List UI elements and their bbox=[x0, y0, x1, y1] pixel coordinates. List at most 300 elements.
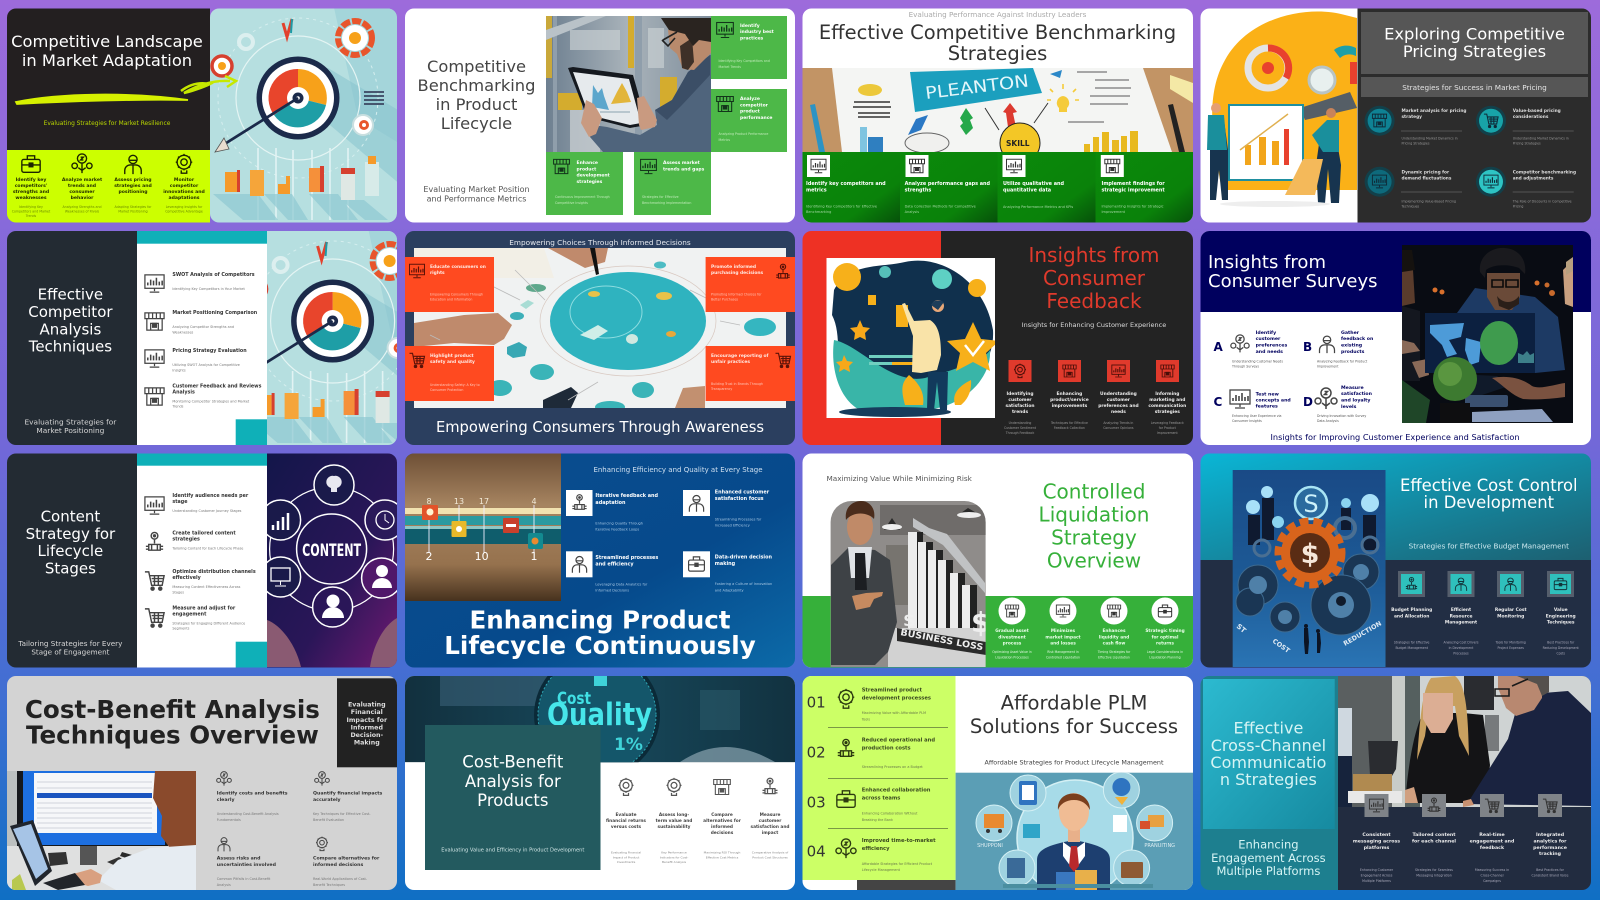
box: product development: development bbox=[576, 173, 611, 179]
item: dynamic pricing: Dynamic pricing for bbox=[1402, 170, 1450, 176]
title: Cost-Benefit Analysis bbox=[25, 695, 320, 724]
item: competitors: Trends bbox=[25, 214, 37, 218]
title card bbox=[425, 725, 600, 870]
item: compare alternatives: Benefit Techniques bbox=[313, 883, 345, 887]
subtitle: Strategies for Effective Budget Management bbox=[1409, 542, 1569, 550]
highlight stroke bbox=[16, 95, 188, 104]
title: Overview bbox=[1047, 548, 1141, 572]
item: customer feedback: Monitoring Competitor Strategies and Market bbox=[172, 400, 250, 404]
title: Feedback bbox=[1046, 289, 1142, 313]
item: market trends: consumer bbox=[69, 189, 95, 195]
callout: unfair practices bbox=[706, 346, 795, 401]
item D: D bbox=[1303, 395, 1313, 409]
item: preferences and needs: customer bbox=[1107, 397, 1131, 403]
item: competitor innovations: Competitive Advantage bbox=[165, 210, 203, 214]
item: customer feedback bbox=[145, 384, 262, 408]
item: consistent messaging: Consistent bbox=[1362, 832, 1391, 838]
item: product improvements: Techniques for Effective bbox=[1050, 421, 1088, 425]
item: marketing strategies: Informing bbox=[1155, 391, 1179, 397]
item: market impact: Minimizes bbox=[1051, 628, 1076, 634]
item: resource management: Processes bbox=[1453, 652, 1469, 656]
photo: businessman with falling bars bbox=[830, 500, 990, 667]
item: audience needs: Identify audience needs per bbox=[172, 493, 249, 499]
item: satisfaction trends: Through Feedback bbox=[1005, 431, 1034, 435]
item: resource management: Resource bbox=[1450, 613, 1472, 619]
subtitle: Stage of Engagement bbox=[31, 648, 110, 657]
item: satisfaction trends: Understanding bbox=[1009, 421, 1031, 425]
title card: Evaluating Value and Efficiency in Product Development bbox=[441, 848, 584, 854]
callout: informed purchasing: purchasing decisions bbox=[711, 270, 764, 276]
photo: businessman with falling bars: $ bbox=[971, 606, 990, 639]
item: asset divestment: Liquidation Processes bbox=[995, 656, 1029, 660]
item: competitor innovations bbox=[163, 154, 205, 214]
item: pricing strategies bbox=[114, 155, 152, 214]
item: SWOT: Identifying Key Competitors in Your Market bbox=[172, 287, 245, 291]
title box: Cross-Channel bbox=[1211, 736, 1326, 755]
item: distribution channels bbox=[145, 569, 256, 594]
item: tailored content: strategies bbox=[172, 536, 200, 542]
item: real-time engagement: Real-time bbox=[1479, 832, 1505, 838]
item: satisfaction trends: customer bbox=[1008, 397, 1032, 403]
row 02: 02 bbox=[807, 743, 826, 761]
image: gears and dollar symbol: S bbox=[1303, 490, 1319, 518]
title: Lifecycle bbox=[441, 114, 512, 133]
item C: concepts and bbox=[1256, 398, 1291, 404]
panel: Competitive Landscape in Market Adaptation bbox=[7, 8, 397, 222]
item: marketing strategies: marketing and bbox=[1149, 397, 1185, 403]
item: consistent messaging: messaging across bbox=[1353, 839, 1400, 845]
item: strategic timing: Liquidation Planning bbox=[1149, 656, 1181, 660]
title: Insights from bbox=[1028, 243, 1160, 267]
item: marketing strategies: strategies bbox=[1155, 409, 1180, 415]
item D: Measure bbox=[1341, 385, 1364, 391]
item: competitor benchmarking bbox=[1476, 167, 1576, 208]
title: Lifecycle Continuously bbox=[444, 631, 756, 660]
item: value engineering: Costs bbox=[1556, 652, 1565, 656]
callout: informed purchasing: Promote informed bbox=[711, 264, 756, 270]
item: iterative feedback: adaptation bbox=[595, 500, 626, 506]
subtitle: Tailoring Strategies for Every bbox=[17, 639, 123, 648]
title: Strategy bbox=[1051, 526, 1137, 550]
item: streamlined processes: Streamlined processes bbox=[595, 555, 658, 561]
box: product development: Competitive Insights bbox=[555, 201, 588, 205]
row 02: Reduced operational and bbox=[862, 738, 935, 744]
item: pricing strategies: positioning bbox=[118, 189, 148, 195]
item: market positioning: Analyzing Competitor Strengths and bbox=[172, 325, 234, 329]
callout: educate consumers: Education and Information bbox=[430, 298, 472, 302]
item: identify costs: Fundamentals bbox=[217, 818, 241, 822]
subtitle: and Performance Metrics bbox=[427, 194, 526, 204]
item: resource management: Analyzing Cost Drivers bbox=[1443, 640, 1479, 644]
callout: informed purchasing bbox=[706, 257, 795, 312]
item: customer feedback: Analysis bbox=[172, 390, 195, 396]
item: marketing strategies: Improvement bbox=[1157, 431, 1178, 435]
item: streamlined processes: and efficiency bbox=[595, 562, 634, 568]
box: industry best practices: Identify bbox=[740, 23, 760, 29]
title box: n Strategies bbox=[1220, 770, 1317, 789]
callout: educate consumers: Empowering Consumers Through bbox=[430, 292, 483, 296]
panel: Effective Cost Control in Development bbox=[1200, 454, 1591, 668]
panel: Competitive Benchmarking in Product Lifecycle bbox=[405, 8, 795, 222]
box: market trends and gaps: Assess market bbox=[663, 160, 701, 166]
item: pricing strategies: Adapting Strategies for bbox=[114, 205, 152, 209]
row 04: Affordable Strategies for Efficient Product bbox=[862, 862, 933, 866]
title: Consumer Surveys bbox=[1208, 271, 1378, 292]
sidebar callout: Decision- bbox=[350, 732, 384, 739]
item A: customer bbox=[1256, 336, 1281, 342]
footer text: Insights for Improving Customer Experience and Satisfaction bbox=[1270, 432, 1520, 442]
item: satisfaction trends: Identifying bbox=[1006, 391, 1034, 397]
item: distribution channels: effectively bbox=[172, 575, 202, 581]
box: product development: product bbox=[576, 166, 597, 172]
item: consistent messaging: Engagement Across bbox=[1361, 874, 1393, 878]
subtitle: Evaluating Strategies for bbox=[25, 418, 117, 426]
item: compare alternatives: alternatives for bbox=[703, 818, 742, 824]
item: strategic timing: returns bbox=[1156, 640, 1174, 646]
row 01: Tools bbox=[861, 717, 870, 721]
item: quantify impacts: Benefit Evaluation bbox=[313, 818, 344, 822]
item: consistent messaging bbox=[1353, 794, 1400, 883]
heading: Empowering Choices Through Informed Decisions bbox=[509, 238, 691, 247]
title: Enhancing Product bbox=[469, 606, 731, 634]
item D: satisfaction bbox=[1341, 391, 1372, 397]
item: cost monitoring bbox=[1495, 571, 1527, 650]
item: long-term value: Benefit Analysis bbox=[662, 860, 686, 864]
item: asset divestment: Optimizing Asset Value in bbox=[992, 650, 1032, 654]
item C: C bbox=[1214, 395, 1222, 409]
row 01: 01 bbox=[807, 694, 826, 712]
row 02: production costs bbox=[862, 746, 911, 752]
item: streamlined processes: Leveraging Data Analytics for bbox=[595, 582, 648, 586]
item: integrated analytics bbox=[1532, 794, 1568, 878]
item: tailored content bbox=[1412, 794, 1456, 878]
item: marketing strategies bbox=[1148, 360, 1186, 435]
item B: feedback on bbox=[1341, 336, 1373, 342]
eyebrow text: Evaluating Performance Against Industry Leaders bbox=[909, 10, 1087, 19]
image: target and bar chart illustration bbox=[267, 231, 397, 445]
item B: products bbox=[1341, 349, 1365, 355]
item: competitor innovations: Monitor bbox=[174, 177, 195, 183]
title: Techniques Overview bbox=[26, 720, 319, 750]
title: Effective Cost Control bbox=[1400, 476, 1578, 495]
item: marketing strategies: communication bbox=[1148, 403, 1186, 409]
title box bbox=[1203, 679, 1335, 829]
item: value-based pricing: Pricing Strategies bbox=[1513, 142, 1541, 146]
image: timeline on wood bbox=[405, 454, 561, 601]
callout: unfair practices: Transparency bbox=[710, 387, 732, 391]
item: quantify impacts: accurately bbox=[313, 797, 341, 803]
callout: product safety: Consumer Protection bbox=[430, 388, 463, 392]
item: market positioning bbox=[145, 310, 258, 334]
item: audience needs: stage bbox=[172, 499, 188, 505]
item: real-time engagement: Measuring Success in bbox=[1475, 868, 1509, 872]
photo: analyst at glowing world map bbox=[1402, 245, 1573, 423]
item: streamlined processes bbox=[566, 551, 658, 592]
title: Competitor bbox=[28, 303, 113, 321]
item: competitor benchmarking: Competitor benchmarking bbox=[1513, 170, 1576, 176]
row 03: 03 bbox=[807, 793, 826, 811]
item: market impact bbox=[1045, 598, 1081, 660]
item: preferences and needs: Analyzing Trends in bbox=[1103, 421, 1133, 425]
item: measure and adjust: Segments bbox=[172, 626, 190, 630]
item: market positioning: Weaknesses bbox=[172, 330, 194, 334]
item: consistent messaging: Enhancing Customer bbox=[1360, 868, 1394, 872]
item: iterative feedback: Iterative feedback and bbox=[595, 493, 659, 499]
item: financial returns: financial returns bbox=[606, 818, 646, 824]
item: value engineering: Value bbox=[1554, 607, 1568, 613]
item: market impact: Risk Management in bbox=[1047, 650, 1079, 654]
item: market analysis: strategy bbox=[1402, 114, 1422, 120]
row 04: 04 bbox=[807, 843, 826, 861]
title box: Effective bbox=[1233, 718, 1303, 738]
item: market positioning: Market Positioning Comparison bbox=[172, 310, 258, 316]
box: competitor performance: competitor bbox=[740, 102, 769, 108]
item: liquidity: Enhances bbox=[1102, 628, 1126, 634]
item: customer satisfaction: Measure bbox=[760, 812, 780, 818]
column: identify competitors: Identify key competitors and bbox=[806, 181, 886, 187]
item: data-driven decisions: Fostering a Culture of Innovation bbox=[715, 582, 772, 586]
item: liquidity bbox=[1097, 598, 1131, 660]
item: financial returns bbox=[606, 778, 646, 864]
item: dynamic pricing bbox=[1365, 167, 1462, 208]
item: liquidity: liquidity and bbox=[1099, 634, 1129, 640]
box: market trends and gaps: Benchmarking Implementation bbox=[642, 201, 691, 205]
item A bbox=[1214, 330, 1287, 368]
item: asset divestment: divestment bbox=[998, 634, 1026, 640]
item: product improvements: product/service bbox=[1050, 397, 1089, 403]
callout: product safety: Understanding Safety: A Key to bbox=[430, 383, 480, 387]
panel: Empowering Consumers Through Awareness bbox=[405, 231, 795, 445]
item A: preferences bbox=[1256, 342, 1287, 348]
title: Liquidation bbox=[1039, 502, 1149, 526]
item: compare alternatives: informed decisions bbox=[313, 862, 363, 868]
box: industry best practices: practices bbox=[740, 36, 764, 42]
item: pricing strategies: strategies and bbox=[114, 183, 152, 189]
box: product development: strategies bbox=[576, 179, 603, 185]
photo: magnifier over cost and quality bbox=[405, 652, 795, 778]
item: market trends: behavior bbox=[71, 195, 94, 201]
box: market trends and gaps: Strategies for Effective bbox=[642, 195, 679, 199]
item: tailored content: for each channel bbox=[1412, 839, 1456, 845]
column: identify competitors bbox=[802, 152, 900, 223]
item: financial returns: versus costs bbox=[611, 824, 642, 830]
item: budget planning: Strategies for Effective bbox=[1394, 640, 1430, 644]
item: quantify impacts: Quantify financial impacts bbox=[313, 790, 383, 796]
item: resource management: Efficient bbox=[1451, 607, 1471, 613]
item: satisfaction trends bbox=[1004, 360, 1037, 435]
title: Insights from bbox=[1208, 252, 1326, 273]
row 03: across teams bbox=[862, 796, 900, 802]
image: timeline on wood: 2 bbox=[426, 550, 432, 563]
sidebar callout: Evaluating bbox=[348, 702, 386, 708]
column: qualitative and quantitative data: quantitative data bbox=[1003, 188, 1051, 194]
subtitle box bbox=[1361, 77, 1588, 97]
image: gears and dollar symbol: COST bbox=[1271, 637, 1292, 655]
item: integrated analytics: analytics for bbox=[1534, 839, 1567, 845]
image: gears and dollar symbol: ST bbox=[1235, 622, 1248, 635]
item: customer feedback: Trends bbox=[171, 404, 184, 408]
column: qualitative and quantitative data: Utilize qualitative and bbox=[1003, 181, 1064, 187]
image: timeline on wood: 1 bbox=[530, 550, 538, 563]
item: tailored content: Strategies for Seamless bbox=[1415, 868, 1453, 872]
illustration: businessman with service icons bbox=[976, 772, 1175, 896]
item: assess risks: uncertainties involved bbox=[217, 862, 276, 868]
callout: product safety: Highlight product bbox=[430, 353, 474, 359]
item: pricing strategies: Assess pricing bbox=[114, 177, 152, 183]
item: financial returns: Evaluating Financial bbox=[611, 850, 641, 854]
item: quantify impacts bbox=[313, 772, 383, 822]
item: competitor innovations: competitor bbox=[170, 183, 199, 189]
photo: colleagues reviewing plans bbox=[1338, 676, 1591, 807]
item: dynamic pricing: Techniques bbox=[1400, 204, 1420, 208]
item: satisfaction trends: trends bbox=[1012, 409, 1028, 415]
title: in Product bbox=[436, 95, 517, 114]
item: customer satisfaction: Comparative Analysis of bbox=[752, 850, 789, 854]
item: measure and adjust: engagement bbox=[172, 612, 207, 618]
column: performance gaps bbox=[900, 152, 998, 223]
panel: Effective Competitor Analysis Techniques bbox=[7, 231, 397, 445]
image: timeline on wood: 10 bbox=[475, 550, 489, 563]
callout: educate consumers: rights bbox=[430, 270, 445, 276]
title: Solutions for Success bbox=[970, 715, 1178, 738]
item: resource management: in Development bbox=[1449, 646, 1474, 650]
callout: unfair practices: Building Trust in Brands Through bbox=[711, 382, 763, 386]
title: Effective bbox=[38, 286, 103, 304]
title: Competitive Landscape bbox=[11, 32, 203, 51]
item: long-term value: Key Performance bbox=[661, 850, 687, 854]
item D: Data Analysis bbox=[1317, 419, 1339, 423]
item: assess risks bbox=[217, 838, 276, 887]
title: Benchmarking bbox=[418, 76, 535, 95]
item: distribution channels: Optimize distribution channels bbox=[172, 569, 256, 575]
item: cost monitoring: Project Expenses bbox=[1498, 646, 1524, 650]
item: integrated analytics: performance bbox=[1533, 845, 1567, 851]
item: competitors: Identifying Key bbox=[19, 205, 43, 209]
item D: Driving Innovation with Survey bbox=[1317, 414, 1366, 418]
item: integrated analytics: Integrated bbox=[1536, 832, 1564, 838]
item A: and needs bbox=[1256, 349, 1283, 355]
item: value-based pricing: Understanding Market Dynamics in bbox=[1513, 136, 1569, 140]
item: strategic timing bbox=[1145, 598, 1185, 660]
item: customer satisfaction: impact bbox=[762, 830, 778, 836]
image: timeline on wood: 17 bbox=[479, 497, 489, 506]
item: compare alternatives: Compare bbox=[711, 812, 733, 818]
box: product development: Continuous Improvement Through bbox=[555, 195, 610, 199]
item: preferences and needs: needs bbox=[1111, 409, 1126, 415]
panel: Effective Cross-Channel Communication Strategies bbox=[1200, 676, 1591, 890]
item: value-based pricing bbox=[1476, 106, 1574, 146]
item: compare alternatives: decisions bbox=[711, 830, 734, 836]
item: tailored content bbox=[146, 530, 243, 550]
row 02 bbox=[807, 738, 935, 769]
item: liquidity: Effective Liquidation bbox=[1098, 656, 1130, 660]
arrow bbox=[181, 76, 236, 93]
item B: Improvement bbox=[1317, 364, 1339, 368]
item: market analysis bbox=[1365, 106, 1466, 146]
title box bbox=[1361, 12, 1588, 74]
image: target and bar chart illustration bbox=[210, 8, 397, 222]
item: data-driven decisions bbox=[683, 551, 772, 592]
illustration: businessman with service icons: PRANUITING bbox=[1144, 843, 1175, 849]
item: real-time engagement bbox=[1470, 794, 1514, 883]
item: pricing strategies: Market Positioning bbox=[118, 210, 148, 214]
item: real-time engagement: Cross-Channel bbox=[1481, 874, 1504, 878]
item: dynamic pricing: demand fluctuations bbox=[1402, 176, 1452, 182]
row 04: Improved time-to-market bbox=[862, 838, 936, 844]
item: budget planning: and Allocation bbox=[1394, 613, 1429, 619]
row 01: Maximizing Value with Affordable PLM bbox=[862, 711, 926, 715]
item: SWOT: SWOT Analysis of Competitors bbox=[172, 272, 255, 278]
item: long-term value: Indicators for Cost- bbox=[660, 855, 688, 859]
callout: unfair practices: unfair practices bbox=[711, 359, 750, 365]
sidebar callout bbox=[337, 678, 397, 767]
title: Controlled bbox=[1043, 480, 1145, 504]
box: competitor performance: Metrics bbox=[718, 138, 730, 142]
item: competitors: strengths and bbox=[13, 189, 49, 195]
item: market analysis: Market analysis for pricing bbox=[1402, 108, 1466, 114]
item: product improvements: Feedback Collection bbox=[1054, 426, 1085, 430]
box: product development: Enhance bbox=[576, 160, 598, 166]
row 03: Enhancing Collaboration Without bbox=[862, 812, 918, 816]
item: market analysis: Pricing Strategies bbox=[1402, 142, 1430, 146]
item: integrated analytics: Best Practices for bbox=[1536, 868, 1565, 872]
item: real-time engagement: feedback bbox=[1480, 845, 1505, 851]
title: Competitive bbox=[427, 57, 526, 76]
photo: analyst at spreadsheet monitor bbox=[7, 771, 196, 890]
item: budget planning: Budget Management bbox=[1395, 646, 1429, 650]
row 04 bbox=[807, 838, 936, 872]
item: iterative feedback: Iterative Feedback Loops bbox=[595, 528, 639, 532]
item: preferences and needs: Consumer Opinions bbox=[1103, 426, 1134, 430]
sidebar callout: Informed bbox=[351, 724, 383, 732]
item B: B bbox=[1303, 340, 1312, 354]
subtitle box: Strategies for Success in Market Pricing bbox=[1402, 83, 1547, 92]
item: liquidity: cash flow bbox=[1103, 640, 1125, 646]
image: timeline on wood: 8 bbox=[426, 497, 432, 506]
item: financial returns: Investments bbox=[617, 860, 636, 864]
sidebar callout: Impacts for bbox=[347, 717, 388, 724]
item: cost monitoring: Monitoring bbox=[1497, 613, 1524, 619]
image: gears and dollar symbol: REDUCTION bbox=[1342, 619, 1383, 648]
item: identify costs: Identify costs and benefits bbox=[217, 790, 288, 796]
row 02: Streamlining Processes on a Budget bbox=[862, 765, 923, 769]
item: marketing strategies: for Product bbox=[1159, 426, 1177, 430]
item: budget planning: Budget Planning bbox=[1391, 607, 1432, 613]
item: resource management: Management bbox=[1445, 620, 1477, 626]
title: Analysis bbox=[39, 320, 101, 338]
item: value engineering: Techniques bbox=[1547, 620, 1575, 626]
item: compare alternatives: Real-World Applications of Cost- bbox=[313, 877, 368, 881]
column: performance gaps: strengths bbox=[905, 188, 931, 194]
item B: Analyzing Feedback for Product bbox=[1317, 360, 1368, 364]
item C: Consumer Insights bbox=[1232, 419, 1262, 423]
item: SWOT bbox=[145, 272, 255, 292]
row 04: Lifecycle Management bbox=[862, 868, 901, 872]
box: industry best practices: industry best bbox=[740, 29, 775, 35]
column: identify competitors: Identifying Key Competitors for Effective bbox=[806, 204, 877, 208]
image: timeline on wood: 4 bbox=[531, 497, 537, 506]
item A: A bbox=[1214, 340, 1224, 354]
item: value-based pricing: considerations bbox=[1513, 114, 1549, 120]
image: gears and dollar symbol bbox=[1233, 470, 1386, 667]
illustration: analysts and whiteboard bbox=[1207, 11, 1357, 207]
item: iterative feedback bbox=[566, 490, 659, 532]
item: long-term value: Assess long- bbox=[659, 812, 689, 818]
box: competitor performance: Analyze bbox=[740, 96, 760, 102]
item: financial returns: Evaluate bbox=[615, 812, 637, 818]
item: market trends bbox=[62, 154, 103, 214]
item C: Test new bbox=[1256, 392, 1280, 398]
